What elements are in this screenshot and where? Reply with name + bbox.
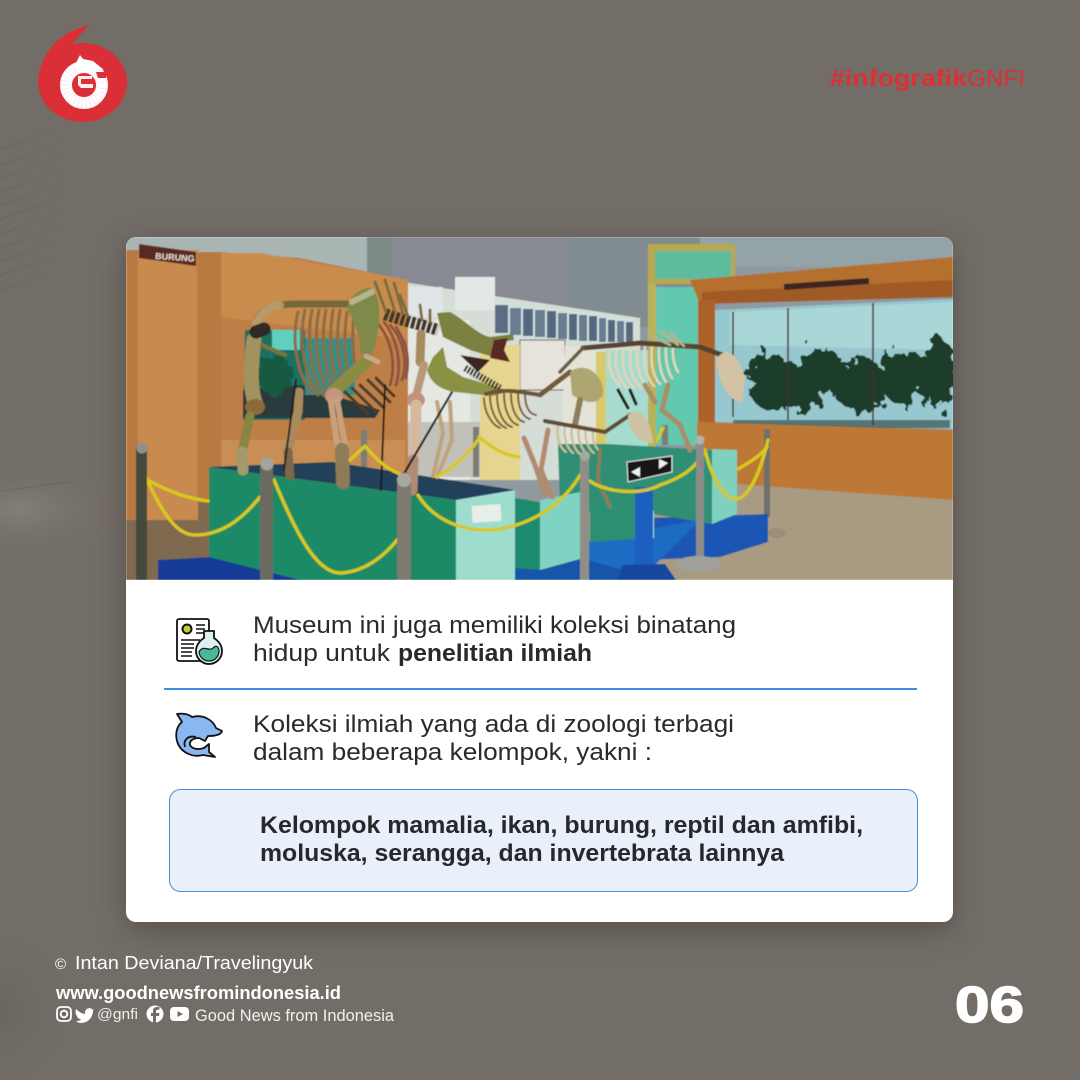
neck pillar and far front leg [420,334,421,362]
panel: card [126,237,956,922]
glass case [715,299,953,429]
portraits [495,305,633,342]
wall middle light [403,282,640,480]
text block 1 [253,612,736,667]
credit: © [55,956,66,973]
icon: dolphin [176,714,222,757]
right cabinet [690,257,953,304]
skeleton 2 [560,331,745,450]
callout: groups: Kelompok mamalia, ikan, burung, reptil dan amfibi, [260,812,863,839]
website: www.goodnewsfromindonesia.id [55,983,341,1003]
callout: groups: moluska, serangga, dan invertebrata lainnya [260,840,785,867]
icon: research document with flask [177,619,222,664]
credit: Intan Deviana/Travelingyuk [75,953,314,973]
sign post [618,456,676,580]
text block 2 [253,711,734,766]
spine and pelvis [256,304,347,322]
support rods [284,380,296,470]
main box [209,462,515,500]
left window [243,330,305,420]
skeleton big [242,280,514,490]
page name: Good News from Indonesia [195,1006,395,1025]
scapula [347,288,379,358]
lower wood [697,422,953,500]
text block 1: hidup untuk [253,640,391,667]
far posts [361,425,786,538]
ribs front cage [378,322,408,385]
left wood [137,250,198,520]
sign burung: BURUNG [155,251,195,264]
skeleton 3 [484,368,603,497]
front posts [136,436,721,580]
skeleton 4 [545,390,653,507]
text block 1: Museum ini juga memiliki koleksi binatang [253,612,736,639]
door [648,244,735,284]
icon: facebook [146,1006,164,1023]
walls [424,266,953,501]
icon: instagram [57,1007,71,1021]
hashtag [830,65,1025,91]
hashtag: #infografik [830,65,967,91]
rear leg [251,340,256,405]
divider [164,688,917,690]
sign burung [139,244,196,266]
photo: museum skeletons [126,237,956,580]
chains [139,428,768,573]
icon: twitter [76,1008,94,1023]
mid box [514,498,541,570]
social row [57,1006,395,1025]
blue bases [640,514,768,560]
hashtag: GNFI [967,65,1025,91]
front leg [333,360,368,392]
text block 2: dalam beberapa kelompok, yakni : [253,739,652,766]
callout: groups [170,790,918,892]
text block 1: penelitian ilmiah [398,640,592,667]
ribs back cage [295,310,356,396]
card shadow [126,245,953,930]
floor [530,500,686,580]
foliage [747,339,956,411]
text block 2: Koleksi ilmiah yang ada di zoologi terbagi [253,711,734,738]
logo [38,25,127,122]
page number: 06 [955,976,1024,1033]
skull [437,312,514,362]
logo emblem: eagle ring [66,55,107,103]
handle: @gnfi [97,1006,138,1023]
icon: youtube [170,1007,189,1021]
far box [558,444,712,524]
